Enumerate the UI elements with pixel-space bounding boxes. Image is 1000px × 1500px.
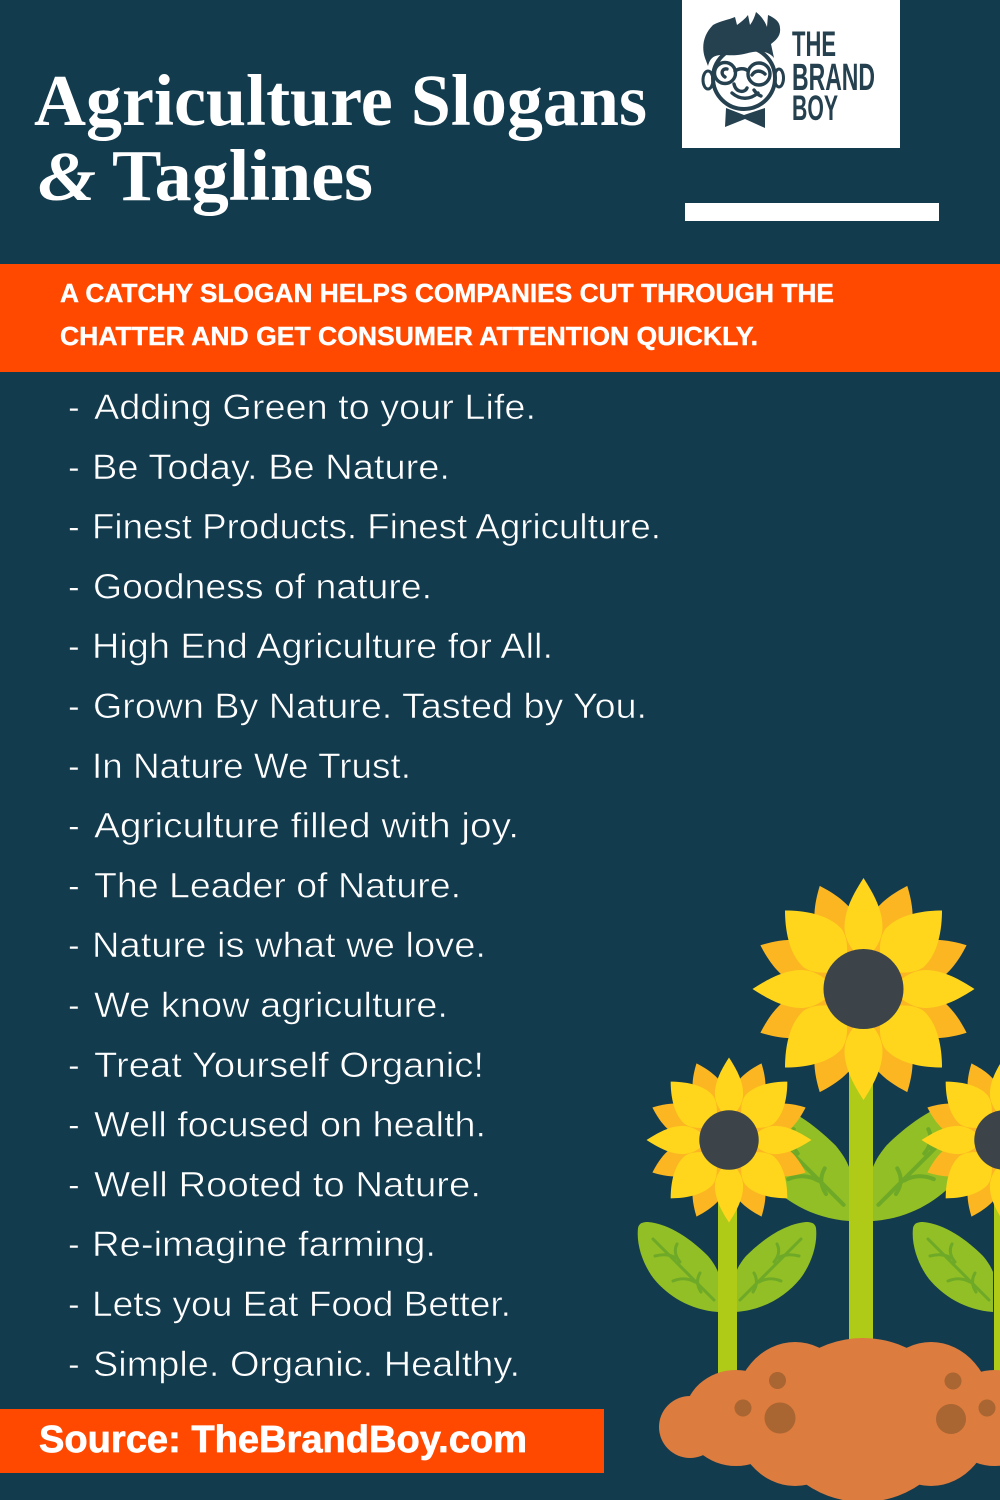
right sunflower plant <box>913 1057 1000 1390</box>
slogan list: Agriculture filled with joy. <box>94 807 519 846</box>
slogan list: - <box>68 1345 80 1384</box>
big sunflower leaves <box>741 1100 981 1221</box>
slogan list: - <box>68 1046 80 1085</box>
slogan list: - <box>68 388 80 427</box>
slogan list <box>68 388 661 1384</box>
logo wordmark <box>792 25 875 128</box>
slogan list: - <box>68 1285 80 1324</box>
big sunflower stem <box>849 1060 873 1350</box>
banner: intro statement: CHATTER AND GET CONSUMER ATTENTION QUICKLY. <box>60 321 758 351</box>
slogan list: - <box>68 448 80 487</box>
slogan list: - <box>68 926 80 965</box>
slogan list: Finest Products. Finest Agriculture. <box>92 508 661 547</box>
slogan list: Well focused on health. <box>94 1106 486 1145</box>
logo wordmark: BRAND <box>792 57 875 99</box>
slogan list: Re-imagine farming. <box>92 1225 436 1264</box>
slogan list: Adding Green to your Life. <box>94 388 536 427</box>
slogan list: Be Today. Be Nature. <box>92 448 450 487</box>
slogan list: - <box>68 1165 80 1204</box>
slogan list: - <box>68 1225 80 1264</box>
source banner <box>0 1409 604 1473</box>
big sunflower head <box>752 877 975 1101</box>
left sunflower plant <box>638 1057 816 1390</box>
title: Agriculture Slogans <box>34 60 647 141</box>
icon: boy mascot with glasses and bow tie <box>703 12 784 128</box>
banner: intro statement: A CATCHY SLOGAN HELPS COMPANIES CUT THROUGH THE <box>60 278 834 308</box>
logo panel: The Brand Boy <box>682 0 900 148</box>
title <box>34 60 647 216</box>
slogan list: High End Agriculture for All. <box>92 627 553 666</box>
slogan list: - <box>68 866 80 905</box>
slogan list: The Leader of Nature. <box>94 866 461 905</box>
slogan list: Treat Yourself Organic! <box>94 1046 484 1085</box>
slogan list: - <box>68 627 80 666</box>
slogan list: - <box>68 807 80 846</box>
slogan list: - <box>68 1106 80 1145</box>
source banner: Source: TheBrandBoy.com <box>39 1419 527 1461</box>
illustration: sunflowers in soil <box>638 877 1000 1500</box>
soil mound <box>659 1338 1000 1500</box>
soil spots <box>734 1372 996 1434</box>
slogan list: - <box>68 567 80 606</box>
slogan list: In Nature We Trust. <box>92 747 411 786</box>
slogan list: Goodness of nature. <box>93 567 432 606</box>
slogan list: Lets you Eat Food Better. <box>92 1285 511 1324</box>
slogan list: - <box>68 986 80 1025</box>
logo wordmark: BOY <box>792 89 838 128</box>
slogan list: Well Rooted to Nature. <box>94 1165 481 1204</box>
slogan list: Simple. Organic. Healthy. <box>93 1345 520 1384</box>
title: Taglines <box>112 135 373 216</box>
slogan list: We know agriculture. <box>94 986 448 1025</box>
slogan list: Grown By Nature. Tasted by You. <box>93 687 647 726</box>
slogan list: - <box>68 508 80 547</box>
banner: intro statement <box>0 264 1000 372</box>
logo wordmark: THE <box>792 25 836 64</box>
slogan list: Nature is what we love. <box>92 926 486 965</box>
slogan list: - <box>68 747 80 786</box>
slogan list: - <box>68 687 80 726</box>
title: & <box>38 139 96 216</box>
white accent bar <box>685 203 939 221</box>
